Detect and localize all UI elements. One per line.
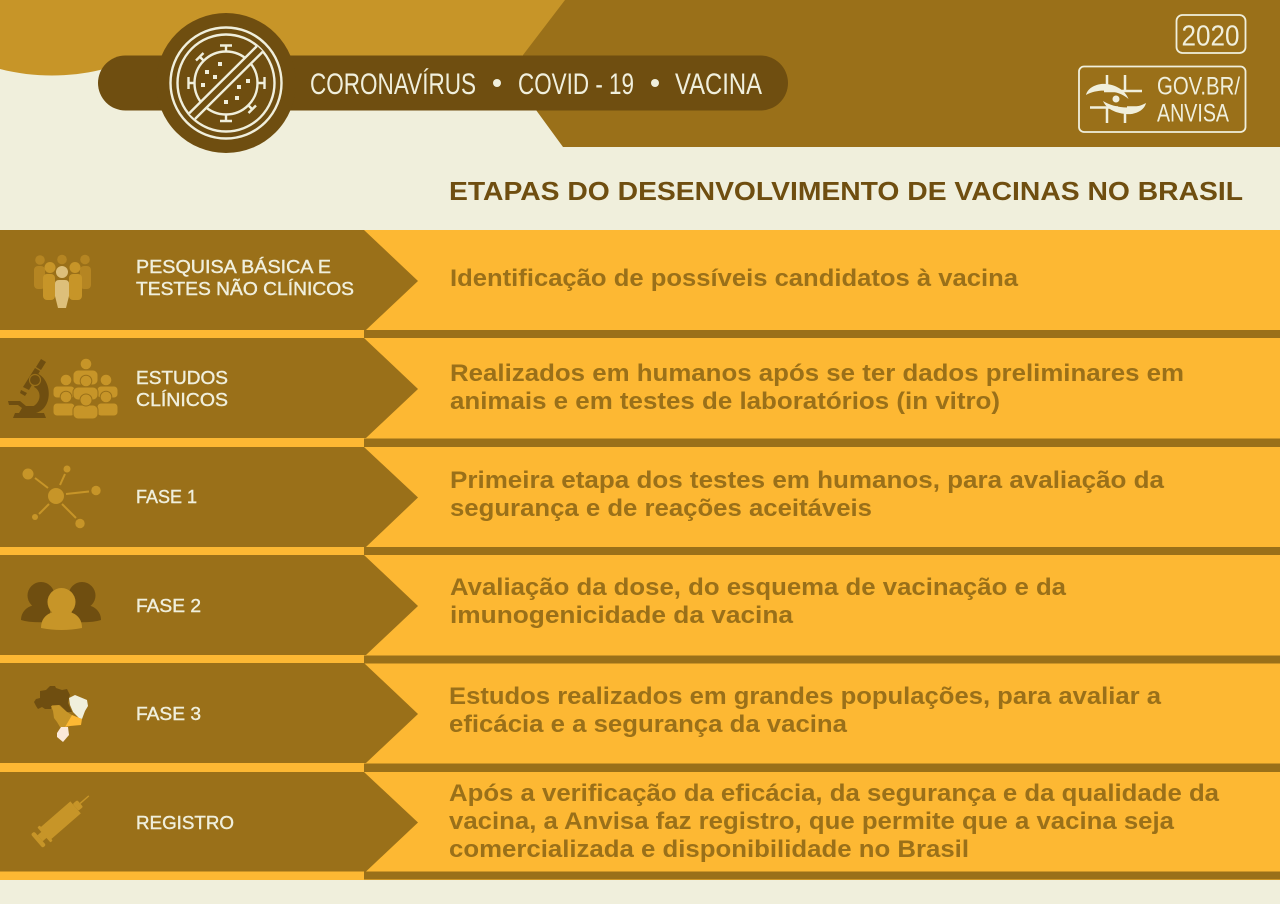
label: FASE 1 bbox=[136, 486, 197, 507]
label: CLÍNICOS bbox=[136, 389, 228, 410]
label: REGISTRO bbox=[136, 812, 234, 833]
label bbox=[136, 367, 228, 410]
icon: map of Brazil bbox=[34, 686, 88, 742]
icon: people group bbox=[34, 255, 91, 308]
panel: registro bbox=[0, 772, 1280, 880]
label: FASE 2 bbox=[136, 595, 201, 616]
label: TESTES NÃO CLÍNICOS bbox=[136, 278, 354, 299]
description: Realizados em humanos após se ter dados preliminares em bbox=[450, 360, 1184, 387]
description: imunogenicidade da vacina bbox=[450, 602, 793, 629]
description bbox=[449, 780, 1219, 863]
description: Identificação de possíveis candidatos à vacina bbox=[450, 265, 1018, 292]
label bbox=[136, 256, 354, 299]
description: Avaliação da dose, do esquema de vacinação e da bbox=[450, 574, 1066, 601]
icon: anvisa symbol bbox=[1086, 75, 1146, 123]
panel: pesquisa básica bbox=[0, 230, 1280, 338]
panel: fase 1 bbox=[0, 447, 1280, 555]
logo: gov.br / anvisa bbox=[1079, 66, 1246, 132]
panel: fase 3 bbox=[0, 663, 1280, 772]
description: vacina, a Anvisa faz registro, que permite que a vacina seja bbox=[449, 808, 1174, 835]
header banner bbox=[98, 13, 788, 153]
description: comercializada e disponibilidade no Brasil bbox=[449, 836, 969, 863]
label: ESTUDOS bbox=[136, 367, 228, 388]
icon: crossed-out virus bbox=[156, 13, 296, 153]
description: segurança e de reações aceitáveis bbox=[450, 495, 872, 522]
description: eficácia e a segurança da vacina bbox=[449, 711, 847, 738]
description bbox=[449, 683, 1161, 738]
description: Estudos realizados em grandes populações, para avaliar a bbox=[449, 683, 1161, 710]
description: Primeira etapa dos testes em humanos, para avaliação da bbox=[450, 467, 1164, 494]
description: animais e em testes de laboratórios (in vitro) bbox=[450, 388, 1000, 415]
description: Após a verificação da eficácia, da segurança e da qualidade da bbox=[449, 780, 1219, 807]
icon: network bbox=[22, 466, 101, 528]
header text: CORONAVÍRUS bbox=[310, 68, 476, 101]
logo: gov.br / anvisa: GOV.BR/ bbox=[1157, 72, 1240, 100]
icon: three people bbox=[21, 582, 101, 630]
table background bbox=[0, 230, 1280, 880]
year badge: 2020 bbox=[1182, 20, 1240, 52]
icon: microscope and group bbox=[8, 358, 118, 419]
icon: syringe bbox=[30, 788, 95, 849]
title: ETAPAS DO DESENVOLVIMENTO DE VACINAS NO BRASIL bbox=[449, 176, 1243, 206]
description bbox=[450, 360, 1184, 415]
label: PESQUISA BÁSICA E bbox=[136, 256, 331, 277]
header text: VACINA bbox=[675, 68, 762, 101]
panel: fase 2 bbox=[0, 555, 1280, 664]
label: FASE 3 bbox=[136, 703, 201, 724]
description bbox=[450, 467, 1164, 522]
logo: gov.br / anvisa: ANVISA bbox=[1157, 100, 1229, 128]
header text: COVID - 19 bbox=[518, 68, 634, 101]
panel: estudos clínicos bbox=[0, 338, 1280, 447]
description bbox=[450, 574, 1066, 629]
header background shapes bbox=[0, 0, 1280, 147]
header text bbox=[310, 68, 762, 101]
